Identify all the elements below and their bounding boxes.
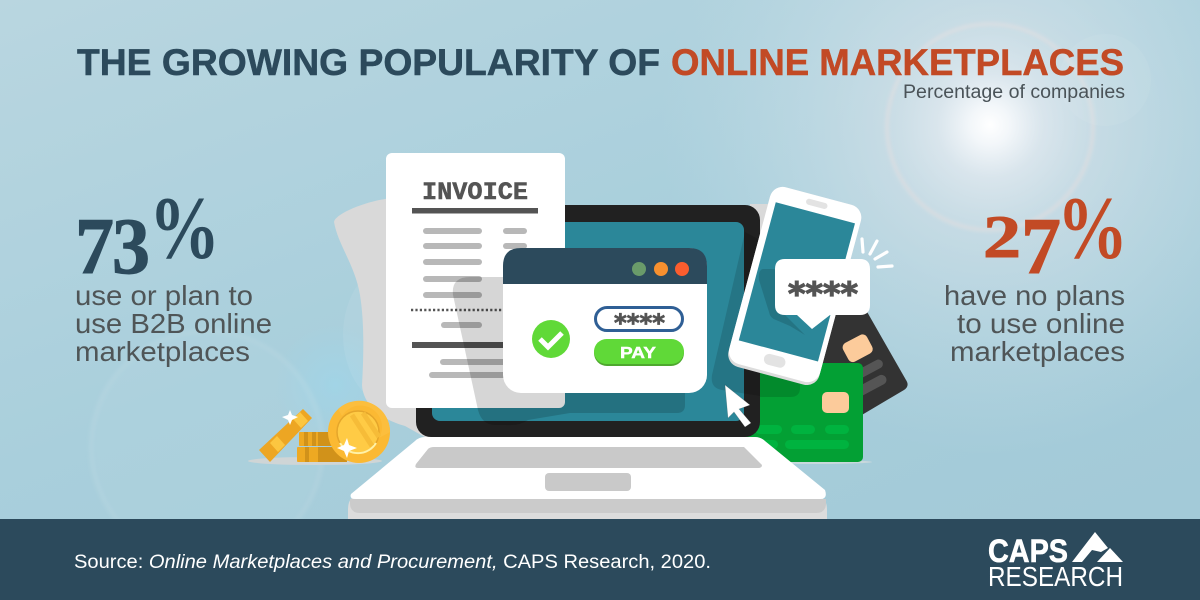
left statistic: 73%: 3	[112, 201, 150, 291]
laptop screen	[416, 205, 760, 437]
pay button: PAY	[620, 345, 656, 362]
footer bar	[0, 519, 1200, 600]
logo: CAPS Research: RESEARCH	[988, 561, 1123, 592]
right statistic: 27%: 7	[1021, 201, 1061, 291]
speech bubble: ****	[788, 275, 858, 313]
left description: marketplaces	[75, 336, 250, 367]
left statistic: 73%	[75, 180, 220, 291]
payment window	[503, 248, 707, 393]
title	[77, 42, 1124, 83]
right statistic: 27%	[983, 180, 1128, 291]
right description: to use online	[957, 308, 1125, 339]
password field	[596, 308, 682, 337]
left statistic: 73%: 7	[75, 201, 114, 291]
black card	[800, 300, 908, 422]
green card	[740, 363, 872, 464]
gold coins	[248, 401, 390, 465]
cursor arrow	[725, 385, 751, 427]
right description	[944, 280, 1125, 367]
left description	[75, 280, 272, 367]
right statistic: 27%: %	[1057, 180, 1128, 278]
illustration: online payment	[248, 153, 908, 519]
left statistic: 73%: %	[149, 180, 220, 278]
right description: have no plans	[944, 280, 1125, 311]
left description: use B2B online	[75, 308, 272, 339]
notification ticks	[862, 239, 892, 267]
logo: CAPS Research: CAPS	[988, 533, 1068, 569]
left description: use or plan to	[75, 280, 253, 311]
payment window shadow	[453, 277, 690, 425]
password field: ****	[614, 309, 665, 337]
gray paper edge behind phone	[750, 204, 778, 260]
curled paper behind invoice	[334, 198, 430, 440]
source citation: Source: Online Marketplaces and Procurement, CAPS Research, 2020.	[74, 552, 711, 573]
subtitle: Percentage of companies	[903, 82, 1125, 103]
title: ONLINE MARKETPLACES	[671, 42, 1124, 83]
invoice heading: INVOICE	[422, 178, 528, 207]
laptop base	[348, 437, 827, 519]
pay button	[594, 339, 684, 366]
invoice document	[386, 153, 565, 408]
right statistic: 27%: 2	[983, 204, 1021, 270]
right description: marketplaces	[950, 336, 1125, 367]
smartphone	[725, 184, 864, 388]
title: THE GROWING POPULARITY OF	[77, 42, 660, 83]
logo: CAPS Research	[988, 532, 1123, 592]
icon: check mark	[532, 320, 570, 358]
speech bubble	[759, 259, 870, 335]
